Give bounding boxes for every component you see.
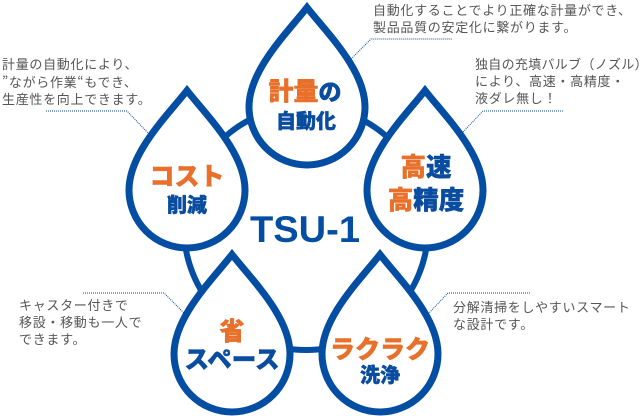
drop: easy cleaning: 洗浄	[360, 364, 400, 387]
drop: space saving	[174, 254, 290, 412]
leader line: high speed	[463, 111, 564, 132]
leader line: easy cleaning	[429, 293, 530, 313]
text block: cost reduction: ”ながら作業“もでき、	[2, 72, 138, 91]
drop: space saving: スペース	[184, 347, 280, 374]
text block: easy cleaning: な設計です。	[453, 317, 534, 332]
text block: space saving: できます。	[19, 332, 86, 347]
leader line: automated weighing	[351, 39, 452, 59]
text block: high speed: により、高速・高精度・	[475, 74, 625, 89]
drop: high speed, high precision: 高速	[400, 154, 452, 182]
text block: cost reduction: 生産性を向上できます。	[2, 92, 151, 107]
drop: automated weighing	[249, 8, 365, 165]
text block: easy cleaning: 分解清掃をしやすいスマート	[453, 300, 631, 315]
drop: automated weighing: 自動化	[276, 110, 336, 133]
text block: space saving: 移設・移動も一人で	[19, 315, 142, 330]
text block: space saving: キャスター付きで	[19, 298, 129, 313]
text block: high speed: 液ダレ無し！	[475, 91, 557, 106]
drop: cost reduction: 削減	[167, 193, 207, 217]
drop: easy cleaning	[322, 254, 438, 412]
text block: cost reduction: 計量の自動化により、	[2, 57, 138, 72]
connecting ring	[184, 106, 428, 350]
center label: TSU-1: TSU-1	[250, 209, 360, 250]
drop: cost reduction: コスト	[149, 163, 225, 191]
drop: space saving: 省	[219, 318, 245, 346]
drop: automated weighing: 計量の	[268, 78, 342, 106]
drop: cost reduction	[129, 90, 245, 248]
text block: automated weighing: 製品品質の安定化に繋がります。	[373, 20, 577, 35]
text block: high speed: 独自の充填バルブ（ノズル）	[475, 57, 643, 72]
leader line: cost reduction	[46, 111, 149, 134]
drop: high speed, high precision	[367, 90, 483, 248]
text block: automated weighing: 自動化することでより正確な計量ができ、	[373, 3, 632, 18]
drop: easy cleaning: ラクラク	[330, 336, 430, 364]
drop: high speed, high precision: 高精度	[388, 187, 464, 215]
leader line: space saving	[83, 293, 184, 313]
